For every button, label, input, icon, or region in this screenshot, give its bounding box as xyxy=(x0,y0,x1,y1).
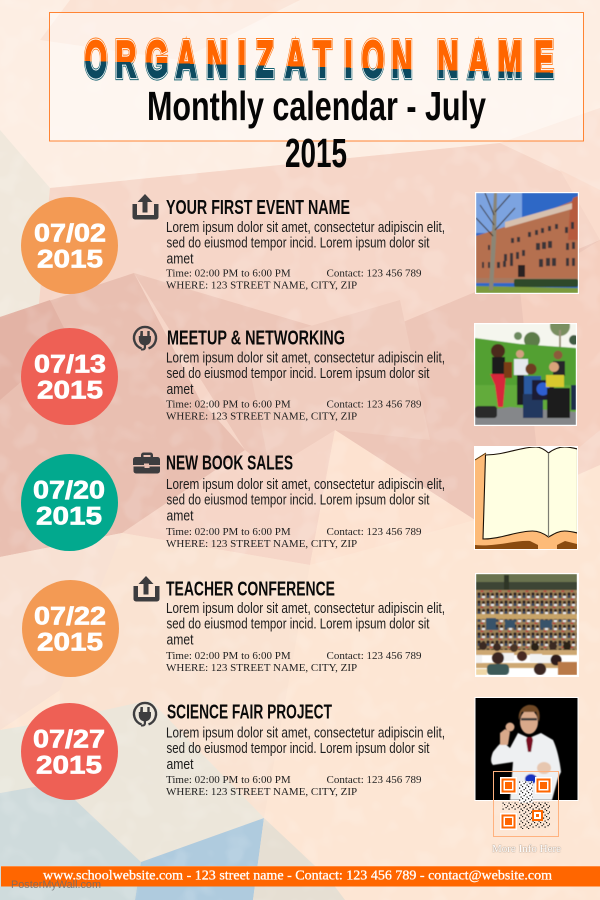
date badge 07/27 xyxy=(21,703,118,800)
event 5 xyxy=(21,697,578,801)
description: amet xyxy=(166,757,194,773)
event details: WHERE: 123 STREET NAME, CITY, ZIP xyxy=(166,786,357,798)
description xyxy=(166,477,445,524)
date badge 07/13 xyxy=(21,328,118,425)
description xyxy=(166,726,445,773)
description: Lorem ipsum dolor sit amet, consectetur adipiscin elit, xyxy=(166,726,445,742)
footer bar xyxy=(1,866,600,886)
event details: Time: 02:00 PM to 6:00 PM xyxy=(166,650,291,662)
event details: Time: 02:00 PM to 6:00 PM xyxy=(166,774,291,786)
date badge 07/13: 2015 xyxy=(37,376,103,404)
date badge 07/02 xyxy=(21,197,118,294)
organization name: ORGANIZATION NAME xyxy=(84,30,554,88)
description: Lorem ipsum dolor sit amet, consectetur adipiscin elit, xyxy=(166,477,445,493)
event details: Time: 02:00 PM to 6:00 PM xyxy=(166,398,291,410)
icon: plug xyxy=(134,327,156,350)
date badge 07/02: 07/02 xyxy=(34,220,106,248)
photo: students with instruments xyxy=(474,316,579,426)
event title: MEETUP & NETWORKING xyxy=(167,328,345,350)
event 3 xyxy=(21,446,578,551)
event details: WHERE: 123 STREET NAME, CITY, ZIP xyxy=(166,662,357,674)
date badge 07/20: 07/20 xyxy=(33,476,105,504)
event details: Contact: 123 456 789 xyxy=(326,650,422,662)
event title: YOUR FIRST EVENT NAME xyxy=(166,197,350,219)
date badge 07/27: 2015 xyxy=(36,752,102,780)
description: sed do eiusmod tempor incid. Lorem ipsum dolor sit xyxy=(166,236,430,252)
date badge 07/22 xyxy=(22,580,119,677)
event title: TEACHER CONFERENCE xyxy=(166,578,335,600)
subtitle: Monthly calendar - July xyxy=(147,83,486,129)
organization name: ORGANIZATION NAME xyxy=(84,30,554,88)
description: Lorem ipsum dolor sit amet, consectetur adipiscin elit, xyxy=(166,350,445,366)
description: sed do eiusmod tempor incid. Lorem ipsum dolor sit xyxy=(166,741,430,757)
event details: Contact: 123 456 789 xyxy=(326,774,422,786)
description: sed do eiusmod tempor incid. Lorem ipsum dolor sit xyxy=(166,366,430,382)
watermark: PosterMyWall.com xyxy=(11,879,101,891)
event title: NEW BOOK SALES xyxy=(166,452,293,474)
QR code xyxy=(494,772,558,836)
date badge 07/02: 2015 xyxy=(37,246,103,274)
illustration: open book xyxy=(474,446,578,550)
description xyxy=(166,601,445,648)
photo: lecture hall xyxy=(475,573,579,677)
header box xyxy=(50,12,584,141)
date badge 07/27: 07/27 xyxy=(33,726,105,754)
event details: Contact: 123 456 789 xyxy=(326,268,422,280)
event 1 xyxy=(21,192,579,294)
description: sed do eiusmod tempor incid. Lorem ipsum dolor sit xyxy=(166,492,430,508)
description: amet xyxy=(166,382,194,398)
footer contact text: www.schoolwebsite.com - 123 street name - Contact: 123 456 789 - contact@website.com xyxy=(43,868,552,884)
description: sed do eiusmod tempor incid. Lorem ipsum dolor sit xyxy=(166,616,430,632)
icon: plug xyxy=(134,703,156,726)
event details: Time: 02:00 PM to 6:00 PM xyxy=(166,526,291,538)
description xyxy=(166,350,445,398)
date badge 07/20 xyxy=(21,454,118,551)
event 4 xyxy=(22,573,579,677)
event details: Contact: 123 456 789 xyxy=(326,526,422,538)
icon: briefcase xyxy=(133,452,160,474)
date badge 07/20: 2015 xyxy=(36,502,102,530)
event details: WHERE: 123 STREET NAME, CITY, ZIP xyxy=(166,280,357,292)
event 2 xyxy=(21,316,579,426)
photo: scientist xyxy=(474,697,578,801)
event title: SCIENCE FAIR PROJECT xyxy=(167,702,332,724)
description: Lorem ipsum dolor sit amet, consectetur adipiscin elit, xyxy=(166,601,445,617)
event details: Contact: 123 456 789 xyxy=(326,398,422,410)
icon: upload xyxy=(134,576,160,602)
subtitle year: 2015 xyxy=(285,130,347,176)
QR caption: More Info Here xyxy=(492,844,561,855)
date badge 07/13: 07/13 xyxy=(34,350,106,378)
description: Lorem ipsum dolor sit amet, consectetur adipiscin elit, xyxy=(166,220,445,236)
description: amet xyxy=(166,252,194,268)
description: amet xyxy=(166,632,194,648)
event details: WHERE: 123 STREET NAME, CITY, ZIP xyxy=(166,410,357,422)
description: amet xyxy=(166,508,194,524)
icon: upload xyxy=(132,194,158,220)
photo: university building xyxy=(475,192,579,294)
event details: WHERE: 123 STREET NAME, CITY, ZIP xyxy=(166,538,357,550)
description xyxy=(166,220,445,268)
date badge 07/22: 2015 xyxy=(37,628,103,656)
event details: Time: 02:00 PM to 6:00 PM xyxy=(166,268,291,280)
organization name: ORGANIZATION NAME xyxy=(84,30,554,88)
date badge 07/22: 07/22 xyxy=(34,602,106,630)
